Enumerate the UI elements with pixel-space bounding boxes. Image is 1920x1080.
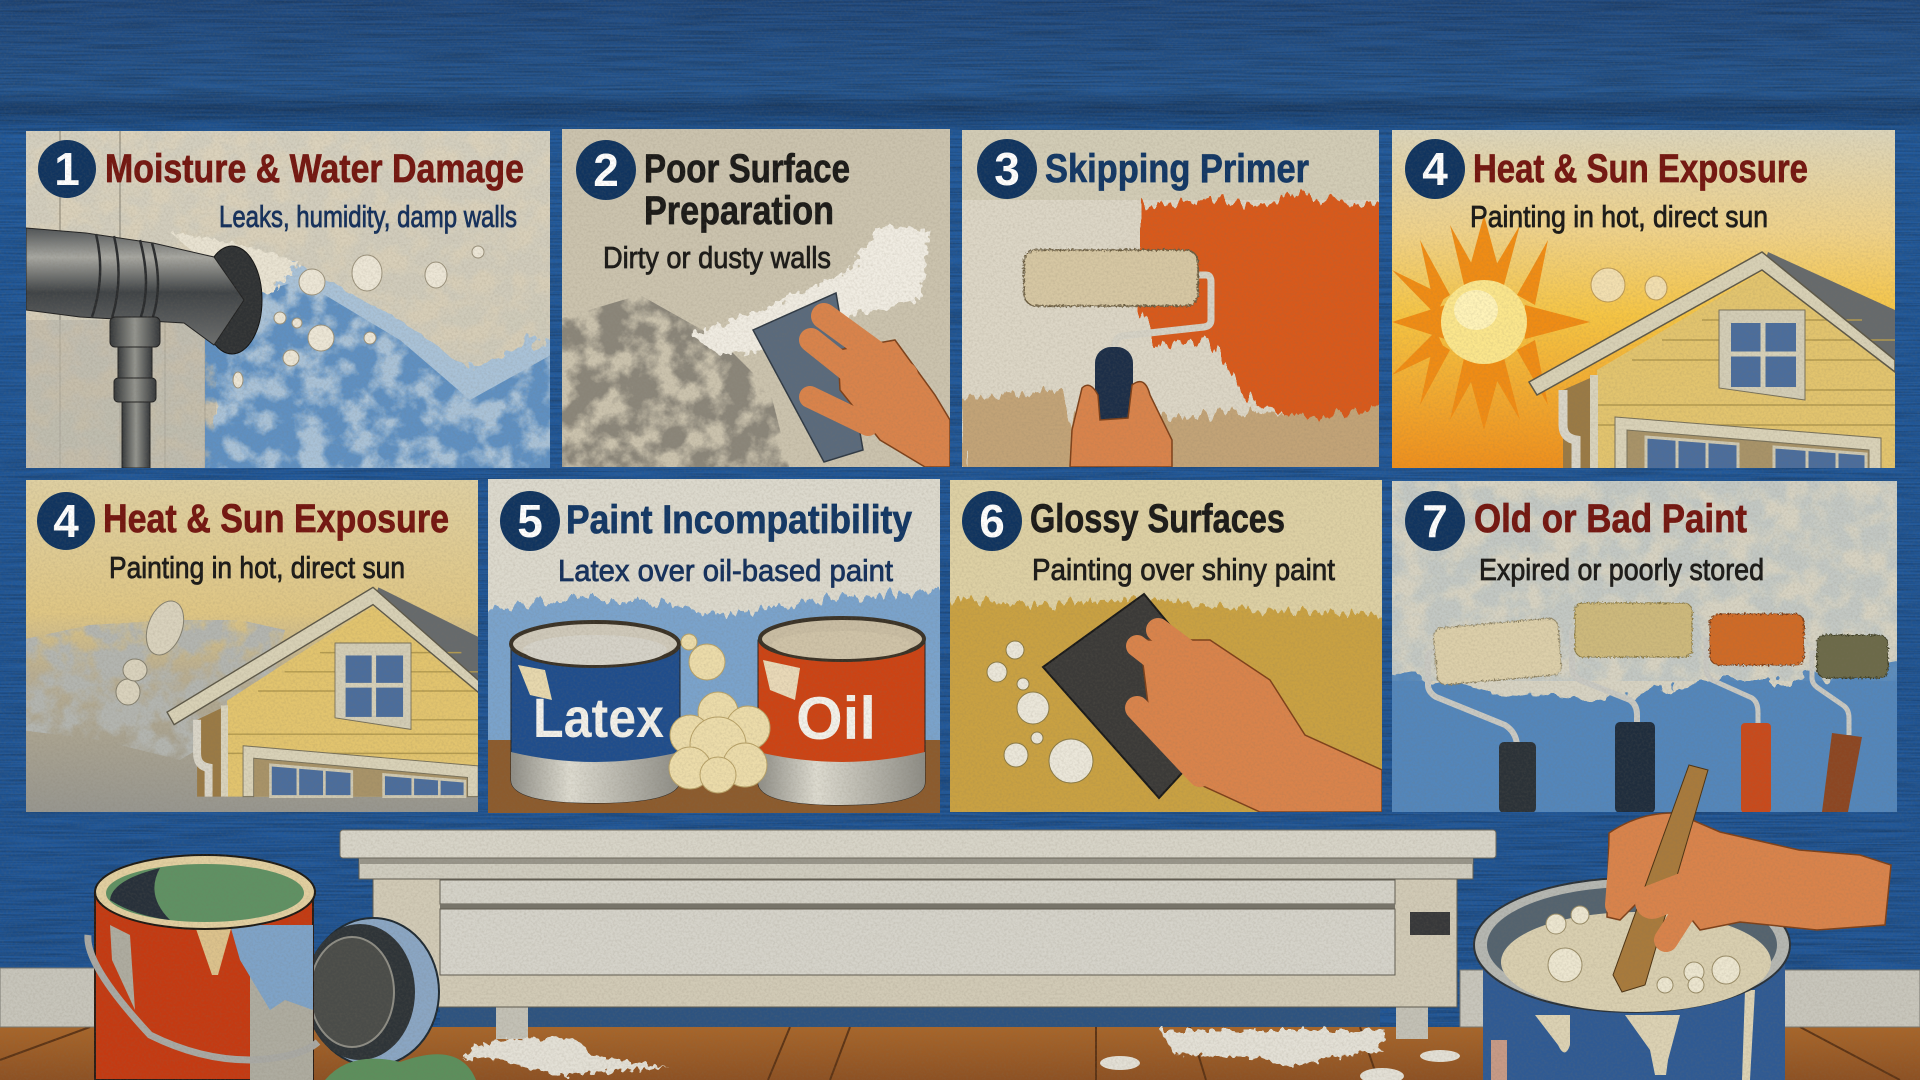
paint lid <box>305 918 439 1066</box>
icon: hand <box>1137 630 1382 812</box>
paint bubbles <box>116 596 191 705</box>
paint swatch <box>1139 198 1385 425</box>
badge 7: 7 <box>1422 495 1448 547</box>
old paint can <box>88 855 318 1080</box>
panel 2: poor surface preparation <box>555 129 950 470</box>
badge 4: 4 <box>1422 143 1448 195</box>
subtitle: expired: Expired or poorly stored <box>1479 552 1764 587</box>
heading: glossy surfaces: Glossy Surfaces <box>1030 497 1285 541</box>
badge 2 <box>576 140 636 200</box>
heading: old or bad paint: Old or Bad Paint <box>1474 497 1747 541</box>
panel 4 repeat: heat and sun exposure <box>20 480 491 812</box>
paint can with brush <box>1474 878 1790 1080</box>
heading: moisture and water damage: Moisture & Water Damage <box>105 147 524 191</box>
icon: paint roller <box>1024 250 1211 467</box>
subtitle: leaks: Leaks, humidity, damp walls <box>219 199 517 234</box>
subtitle: dirty walls: Dirty or dusty walls <box>603 240 831 275</box>
badge 3: 3 <box>994 143 1020 195</box>
badge 1 <box>38 140 96 198</box>
badge 5 <box>500 491 560 551</box>
heading: skipping primer: Skipping Primer <box>1045 147 1309 191</box>
subtitle: latex over oil: Latex over oil-based paint <box>558 553 893 588</box>
icon: foam blob <box>669 634 770 793</box>
subtitle: shiny paint: Painting over shiny paint <box>1032 552 1335 587</box>
icon: leaking pipe <box>26 228 262 468</box>
heading: heat and sun: Heat & Sun Exposure <box>1473 147 1808 191</box>
paint spills on floor <box>462 1030 1460 1080</box>
icon: sanding block <box>1043 594 1240 798</box>
green leaf <box>325 1054 476 1080</box>
panel 5: paint incompatibility <box>480 479 945 813</box>
icon: house <box>167 587 491 797</box>
badge 4 <box>1405 139 1465 199</box>
roller 1 <box>1428 618 1562 813</box>
baseboard left <box>0 968 100 1027</box>
badge 3 <box>977 139 1037 199</box>
hand holding brush <box>1607 765 1891 992</box>
icon: sun <box>1392 215 1590 430</box>
heading: heat and sun repeat: Heat & Sun Exposure <box>103 497 449 541</box>
floor <box>0 1027 1920 1080</box>
icon: oil can <box>758 618 925 805</box>
panel 1: moisture and water damage <box>26 131 560 480</box>
roller 4 <box>1812 635 1888 812</box>
badge 6: 6 <box>979 495 1005 547</box>
paint bubbles <box>1591 268 1667 302</box>
icon: hand <box>810 316 950 467</box>
icon: oil can: Oil <box>796 685 876 752</box>
heading: poor surface preparation <box>644 147 850 233</box>
heading: poor surface preparation: Poor Surface <box>644 147 850 191</box>
subtitle: hot sun repeat: Painting in hot, direct sun <box>109 550 405 585</box>
badge 1: 1 <box>54 143 80 195</box>
icon: latex can <box>511 622 680 803</box>
panel 7: old or bad paint <box>1385 481 1905 820</box>
subtitle: hot sun: Painting in hot, direct sun <box>1470 199 1768 234</box>
roller 2 <box>1572 603 1692 813</box>
panel 6: glossy surfaces <box>945 480 1390 830</box>
baseboard right <box>1460 970 1920 1027</box>
badge 4 repeat: 4 <box>53 495 79 547</box>
badge 7 <box>1405 491 1465 551</box>
heading: paint incompatibility: Paint Incompatibility <box>566 498 913 542</box>
radiator cover <box>340 830 1496 1039</box>
icon: sponge <box>753 293 863 462</box>
icon: latex can: Latex <box>533 686 664 749</box>
paint bubbles <box>233 246 484 388</box>
icon: house <box>1529 252 1895 470</box>
badge 4 repeat <box>37 492 95 550</box>
paint bubbles <box>987 641 1093 783</box>
heading: poor surface preparation: Preparation <box>644 189 834 233</box>
roller 3 <box>1706 614 1804 813</box>
badge 5: 5 <box>517 495 543 547</box>
badge 2: 2 <box>593 144 619 196</box>
panel 4: heat and sun exposure <box>1392 130 1895 470</box>
badge 6 <box>962 491 1022 551</box>
panel 3: skipping primer <box>962 130 1385 480</box>
